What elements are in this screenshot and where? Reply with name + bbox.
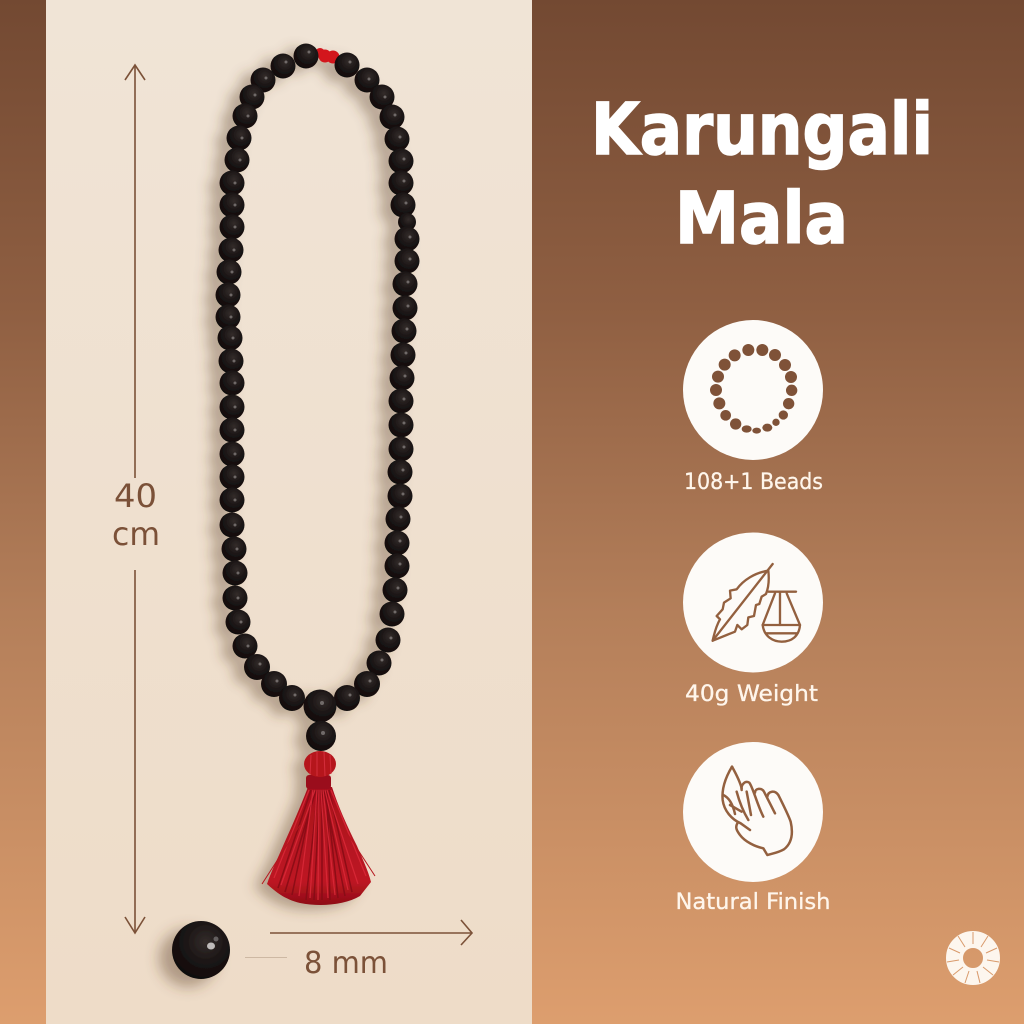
red knot at top of mala bbox=[315, 48, 340, 64]
label: 108+1 Beads: 108+1 Beads bbox=[684, 470, 823, 495]
dimension label: 8 mm: 8 mm bbox=[304, 946, 388, 981]
title bbox=[591, 88, 933, 260]
dimension arrow: 8 mm bead size bbox=[245, 920, 472, 958]
panel: product photo area bbox=[46, 0, 532, 1024]
icon: circle of beads bbox=[683, 320, 823, 460]
bead strand bbox=[216, 44, 420, 751]
feature: 108+1 beads bbox=[683, 320, 823, 495]
feature: 40g weight bbox=[683, 532, 823, 707]
feature: natural finish bbox=[676, 742, 830, 915]
dimension label: 40 cm: 40 bbox=[114, 477, 157, 515]
dimension label: 40 cm bbox=[112, 477, 160, 553]
single loose bead bbox=[172, 921, 230, 979]
label: 40g Weight: 40g Weight bbox=[685, 682, 818, 707]
logo: rudraksha mark bbox=[947, 932, 999, 983]
icon: feather and scale bbox=[683, 532, 823, 672]
title: Mala bbox=[675, 177, 848, 260]
dimension label: 40 cm: cm bbox=[112, 515, 160, 553]
bead highlights bbox=[230, 50, 412, 735]
label: Natural Finish: Natural Finish bbox=[676, 890, 830, 915]
icon: hand touching leaf bbox=[683, 742, 823, 882]
tassel bbox=[262, 751, 375, 905]
title: Karungali bbox=[591, 88, 933, 171]
dimension arrow: 40 cm length bbox=[125, 65, 145, 933]
illustration: karungali bead mala bbox=[216, 44, 420, 905]
